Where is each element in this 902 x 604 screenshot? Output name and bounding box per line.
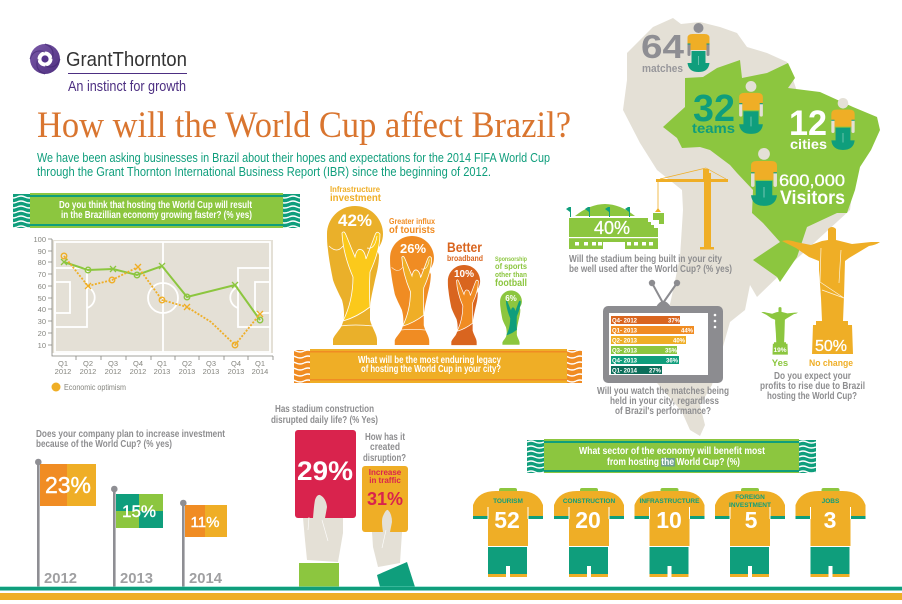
trophy: broadband 10%: 10%	[454, 269, 474, 280]
stat: 600,000 visitors: 600,000	[779, 171, 845, 190]
chart: economic optimism line chart on football pitch: 2012	[80, 367, 96, 376]
stat: 600,000 visitors	[751, 148, 845, 209]
chart legend: Economic optimism	[64, 383, 126, 392]
profits question: Do you expect your	[774, 371, 851, 382]
chart: economic optimism line chart on football pitch: 90	[38, 247, 46, 256]
banner: sector question: from hosting the World Cup? (%)	[607, 457, 740, 468]
jersey: jobs 3: JOBS	[822, 498, 840, 505]
disruption question: Has stadium construction	[275, 404, 374, 415]
sub question: created	[370, 442, 400, 453]
jersey: construction 20: 20	[575, 507, 601, 533]
banner: sector question: What sector of the economy will benefit most	[579, 446, 766, 457]
trophy: tourists 26%: of tourists	[389, 225, 435, 236]
television bar chart: Q4- 2012	[612, 318, 638, 324]
stat: 12 cities: cities	[790, 137, 827, 152]
jersey: tourism 52: 52	[494, 507, 520, 533]
television bar chart: 36%	[666, 358, 679, 364]
banner: sector question	[527, 439, 816, 473]
statue small: yes 19%: Yes	[772, 358, 788, 369]
intro text: We have been asking businesses in Brazil about their hopes and expectations for the 2014 FIFA World Cup	[37, 151, 550, 165]
trophy: infrastructure 42%	[327, 184, 383, 345]
trophy: broadband 10%: Better	[447, 239, 482, 255]
television bar chart: 35%	[665, 348, 678, 354]
intro text	[37, 151, 550, 179]
trophy: infrastructure 42%: Infrastructure	[330, 184, 380, 194]
trophy: sponsorship 6%	[495, 257, 528, 345]
chart: economic optimism line chart on football pitch: 2012	[130, 367, 146, 376]
red card and hand 29%	[295, 430, 356, 587]
jersey: foreign investment 5	[715, 488, 785, 577]
banner: economy question: Do you think that hosting the World Cup will result	[59, 200, 253, 211]
trophy: infrastructure 42%: 42%	[338, 211, 372, 230]
chart: economic optimism line chart on football pitch: 70	[38, 270, 46, 279]
stat: 64 matches: matches	[642, 63, 683, 75]
yellow card and hand 31%: in traffic	[369, 476, 401, 485]
banner: legacy question: of hosting the World Cup in your city?	[361, 364, 501, 375]
chart: economic optimism line chart on football pitch: 10	[38, 341, 46, 350]
logo: Grant Thornton: GrantThornton	[66, 49, 187, 71]
jersey: foreign investment 5: 5	[745, 507, 758, 533]
chart: economic optimism line chart on football pitch: 2013	[154, 367, 170, 376]
chart: economic optimism line chart on football pitch: 2012	[55, 367, 71, 376]
stadium question: be well used after the World Cup? (% yes)	[569, 264, 732, 275]
stat: 600,000 visitors: Visitors	[780, 188, 845, 209]
chart: economic optimism line chart on football pitch: 60	[38, 282, 46, 291]
yellow card and hand 31%: Increase	[369, 468, 402, 477]
investment question: Does your company plan to increase investment	[36, 429, 226, 440]
investment question: because of the World Cup? (% yes)	[36, 439, 172, 450]
trophy: tourists 26%	[389, 217, 435, 345]
flag 2012 23%: 23%	[45, 472, 91, 498]
stat: 12 cities	[789, 98, 855, 152]
television bar chart	[603, 280, 723, 383]
television bar chart: Q1- 2013	[612, 328, 638, 334]
jersey: tourism 52	[473, 488, 543, 577]
television bar chart: 44%	[681, 328, 694, 334]
flag 2012 23%	[35, 459, 96, 588]
flag 2013 15%: 2013	[120, 570, 153, 587]
chart: economic optimism line chart on football pitch: 30	[38, 317, 46, 326]
statue large: no change 50%: 50%	[815, 338, 847, 355]
statue large: no change 50%: No change	[809, 358, 853, 369]
stat: 32 teams	[692, 81, 763, 136]
stadium 40%: 40%	[594, 218, 630, 238]
statue small: yes 19%: 19%	[773, 347, 787, 354]
television bar chart: 40%	[673, 338, 686, 344]
chart: economic optimism line chart on football pitch: Q1	[255, 359, 265, 368]
trophy: sponsorship 6%: 6%	[505, 294, 517, 303]
logo: Grant Thornton	[30, 44, 187, 95]
sub question: disruption?	[363, 453, 406, 464]
jersey: construction 20	[554, 488, 624, 577]
map: Brazil	[663, 60, 880, 282]
chart: economic optimism line chart on football pitch: Q3	[108, 359, 118, 368]
chart: economic optimism line chart on football pitch: Q2	[83, 359, 93, 368]
television bar chart: 27%	[649, 368, 662, 374]
trophy: sponsorship 6%: of sports	[495, 262, 528, 271]
stadium 40%	[566, 204, 658, 250]
banner: legacy question	[294, 349, 582, 383]
chart: economic optimism line chart on football pitch: 40	[38, 305, 46, 314]
yellow card and hand 31%	[362, 466, 415, 587]
flag 2014 11%: 11%	[191, 514, 219, 531]
intro text: through the Grant Thornton International Business Report (IBR) since the beginning of 2012.	[37, 165, 491, 179]
title: How will the World Cup affect Brazil?	[37, 105, 571, 146]
statue large: no change 50%	[782, 227, 880, 369]
sub question: How has it	[365, 432, 406, 443]
television bar chart: Q4- 2013	[612, 358, 638, 364]
chart: economic optimism line chart on football pitch: 2014	[252, 367, 268, 376]
jersey: infrastructure 10: INFRASTRUCTURE	[640, 498, 700, 505]
chart: economic optimism line chart on football pitch: Q1	[157, 359, 167, 368]
chart: economic optimism line chart on football pitch: 100	[33, 235, 46, 244]
flag 2014 11%	[180, 500, 227, 588]
flag 2013 15%: 15%	[122, 502, 156, 521]
crane	[653, 168, 728, 250]
television question: Will you watch the matches being	[597, 386, 729, 397]
trophy: broadband 10%	[447, 239, 483, 345]
investment question	[36, 429, 226, 450]
stat: 12 cities: 12	[789, 104, 827, 143]
map: South America	[623, 18, 860, 436]
jersey: construction 20: CONSTRUCTION	[563, 498, 615, 505]
television bar chart: Q1- 2014	[612, 368, 638, 374]
jersey: foreign investment 5: FOREIGN	[735, 494, 765, 501]
chart: economic optimism line chart on football pitch: 2013	[203, 367, 219, 376]
chart: economic optimism line chart on football pitch: Q4	[231, 359, 241, 368]
chart: economic optimism line chart on football pitch: Q1	[58, 359, 68, 368]
flag 2013 15%	[111, 486, 163, 588]
stat: 32 teams: teams	[692, 121, 735, 136]
television question: of Brazil's performance?	[615, 406, 711, 417]
jersey: jobs 3: 3	[824, 507, 836, 533]
television question	[597, 386, 729, 417]
trophy: infrastructure 42%: investment	[330, 193, 382, 204]
stat: 64 matches	[641, 23, 710, 75]
banner: economy question	[13, 193, 300, 228]
disruption question: disrupted daily life? (% Yes)	[271, 415, 378, 426]
profits question: profits to rise due to Brazil	[760, 381, 865, 392]
trophy: sponsorship 6%: other than	[495, 272, 527, 279]
trophy: broadband 10%: broadband	[447, 254, 483, 263]
chart: economic optimism line chart on football pitch: 2012	[105, 367, 121, 376]
yellow card and hand 31%: 31%	[367, 489, 403, 509]
banner: economy question: in the Brazillian economy growing faster? (% yes)	[61, 210, 252, 221]
stat: 64 matches: 64	[641, 28, 685, 65]
trophy: sponsorship 6%: football	[495, 278, 527, 289]
profits question	[760, 371, 865, 402]
chart: economic optimism line chart on football pitch: 2013	[228, 367, 244, 376]
statue small: yes 19%	[761, 307, 798, 369]
logo: Grant Thornton: An instinct for growth	[68, 79, 186, 95]
stadium question: Will the stadium being built in your city	[569, 254, 722, 265]
jersey: tourism 52: TOURISM	[493, 498, 523, 505]
chart: economic optimism line chart on football pitch: 2013	[179, 367, 195, 376]
trophy: tourists 26%: Greater influx	[389, 217, 435, 226]
television bar chart: Q3- 2013	[612, 348, 638, 354]
footer stripes	[0, 586, 902, 600]
trophy: tourists 26%: 26%	[400, 241, 426, 256]
jersey: infrastructure 10	[634, 488, 704, 577]
disruption question	[271, 404, 378, 426]
stat: 32 teams: 32	[693, 88, 735, 130]
chart: economic optimism line chart on football pitch: 20	[38, 329, 46, 338]
chart: economic optimism line chart on football pitch: Q3	[206, 359, 216, 368]
chart: economic optimism line chart on football pitch: Q2	[182, 359, 192, 368]
chart: economic optimism line chart on football pitch: Q4	[133, 359, 143, 368]
television bar chart: 37%	[668, 318, 681, 324]
chart: economic optimism line chart on football pitch	[33, 235, 273, 376]
flag 2012 23%: 2012	[44, 570, 77, 587]
banner: legacy question: What will be the most enduring legacy	[358, 355, 501, 366]
trophy: sponsorship 6%: Sponsorship	[495, 257, 527, 263]
chart: economic optimism line chart on football pitch: 50	[38, 294, 46, 303]
chart: economic optimism line chart on football pitch: 80	[38, 258, 46, 267]
flag 2014 11%: 2014	[189, 570, 223, 587]
jersey: foreign investment 5: INVESTMENT	[729, 502, 771, 509]
profits question: hosting the World Cup?	[767, 391, 857, 402]
sub question	[363, 432, 406, 464]
stadium question	[569, 254, 732, 275]
television bar chart: Q2- 2013	[612, 338, 638, 344]
jersey: jobs 3	[796, 488, 866, 577]
red card and hand 29%: 29%	[297, 456, 353, 486]
jersey: infrastructure 10: 10	[656, 507, 682, 533]
television question: held in your city, regardless	[610, 396, 719, 407]
